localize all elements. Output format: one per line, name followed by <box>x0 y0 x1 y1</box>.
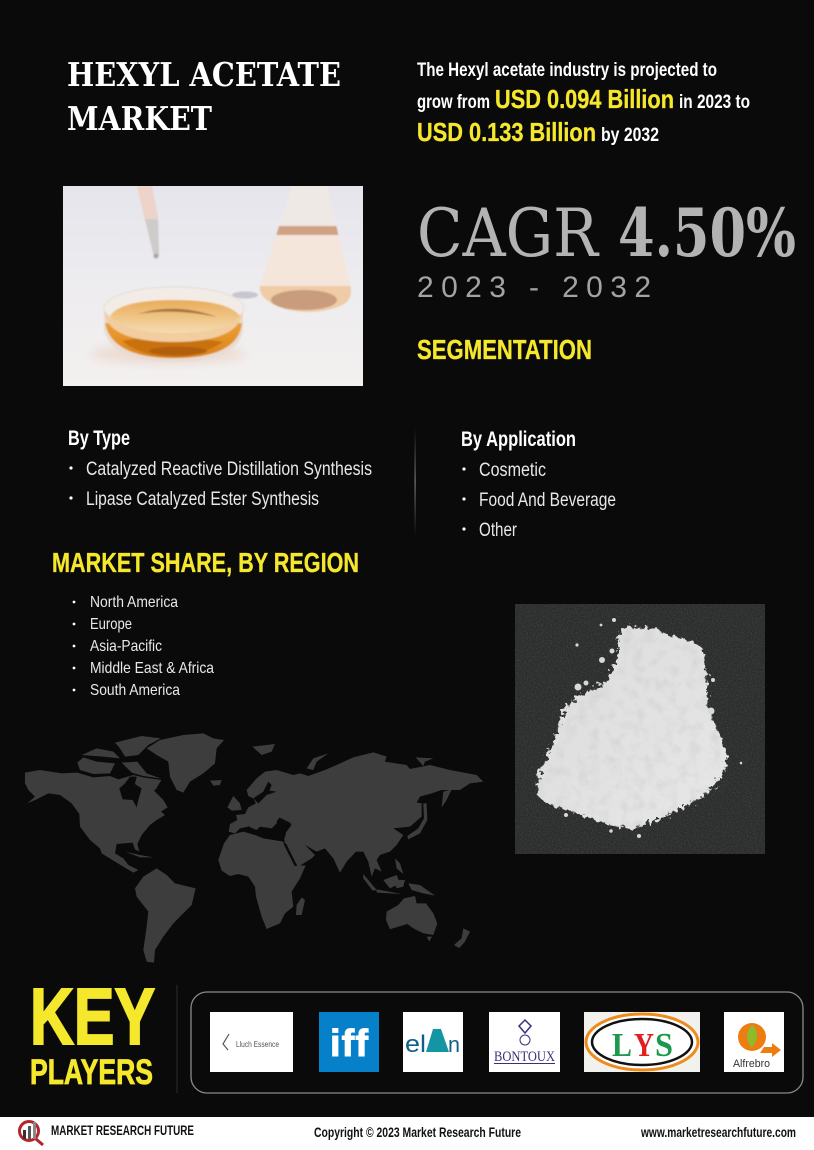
market projection summary: USD 0.133 Billion <box>417 117 596 147</box>
market projection summary <box>417 60 750 147</box>
black sea <box>277 818 292 826</box>
CAGR period: 2023 - 2032 <box>417 271 651 304</box>
logo: elan: n <box>448 1032 460 1057</box>
hudson bay <box>119 777 142 807</box>
footer bar <box>0 1117 814 1150</box>
brand name: MARKET RESEARCH FUTURE <box>51 1123 194 1138</box>
baltic sea <box>253 782 277 803</box>
australia <box>386 896 437 935</box>
segment: by type: Catalyzed Reactive Distillation Synthesis <box>86 459 372 480</box>
uk and ireland <box>227 796 242 811</box>
logo: iff <box>319 1012 379 1072</box>
logo: iff: iff <box>330 1023 368 1065</box>
svalbard <box>252 744 275 755</box>
region list: Europe <box>90 616 132 633</box>
world map <box>25 733 483 963</box>
photo: white powder <box>515 604 765 854</box>
title <box>67 55 341 138</box>
japan <box>407 803 427 839</box>
market projection summary: USD 0.094 Billion <box>495 84 674 114</box>
tasmania <box>427 937 432 942</box>
region list: North America <box>90 594 178 611</box>
logo: alfrebro <box>724 1012 784 1072</box>
ellesmere island <box>115 736 161 757</box>
region list <box>73 594 214 699</box>
cuba <box>125 852 153 857</box>
segment: by application: Food And Beverage <box>479 490 616 511</box>
severnaya islands <box>416 757 433 766</box>
region list: Middle East & Africa <box>90 660 214 677</box>
region list: South America <box>90 682 180 699</box>
copyright: Copyright © 2023 Market Research Future <box>314 1125 521 1140</box>
eurasia <box>229 752 483 877</box>
africa <box>218 832 306 929</box>
logo: lys: Y <box>634 1027 654 1064</box>
segment: by application <box>461 428 616 541</box>
market projection summary: The Hexyl acetate industry is projected to <box>417 60 717 81</box>
logo: elan <box>403 1012 463 1072</box>
key players heading: PLAYERS <box>30 1053 153 1092</box>
flask shadow <box>232 292 258 298</box>
victoria island <box>77 757 115 774</box>
segment: by application: Cosmetic <box>479 460 546 481</box>
logo: lys: L <box>612 1027 632 1064</box>
market share heading: MARKET SHARE, BY REGION <box>52 547 359 578</box>
logo: bontoux: BONTOUX <box>494 1049 555 1065</box>
CAGR figure <box>417 194 796 272</box>
key players panel <box>191 992 803 1093</box>
novaya zemlya <box>307 753 328 770</box>
segment: by type <box>68 427 372 510</box>
logo: lluch essence: Lluch Essence <box>236 1040 279 1049</box>
south america <box>135 868 196 963</box>
red sea <box>283 843 297 866</box>
madagascar <box>296 897 305 915</box>
north america <box>25 770 168 873</box>
mediterranean sea <box>248 826 286 839</box>
key players heading: KEY <box>30 972 155 1061</box>
segment: by application: By Application <box>461 428 576 451</box>
baffin island <box>122 762 161 779</box>
market projection summary: by 2032 <box>601 125 659 146</box>
title: HEXYL ACETATE <box>67 55 341 94</box>
market projection summary: in 2023 to <box>679 92 750 113</box>
iceland <box>210 780 222 786</box>
logo: lluch essence <box>210 1012 293 1072</box>
logo: elan: el <box>405 1031 426 1058</box>
southeast asia islands <box>363 858 435 896</box>
CAGR figure: CAGR <box>417 195 600 272</box>
flask <box>259 187 352 313</box>
market projection summary: grow from <box>417 92 490 113</box>
new zealand <box>454 928 470 948</box>
kamchatka <box>442 789 452 807</box>
segment: by type: Lipase Catalyzed Ester Synthesis <box>86 489 319 510</box>
petri dish <box>90 287 246 364</box>
logo: market research future <box>20 1122 43 1145</box>
segment: by type: By Type <box>68 427 130 450</box>
pipette <box>137 186 159 258</box>
logo: lys <box>584 1012 700 1072</box>
key players heading <box>30 972 155 1092</box>
title: MARKET <box>67 99 212 138</box>
photo: petri dish and flask <box>63 186 363 386</box>
logo: lys: S <box>655 1027 673 1064</box>
greenland <box>147 733 224 793</box>
parry islands <box>82 748 120 758</box>
logo: bontoux <box>489 1012 560 1072</box>
segment: by application: Other <box>479 520 518 541</box>
segmentation heading: SEGMENTATION <box>417 334 592 365</box>
region list: Asia-Pacific <box>90 638 162 655</box>
logo: alfrebro: Alfrebro <box>733 1058 770 1070</box>
